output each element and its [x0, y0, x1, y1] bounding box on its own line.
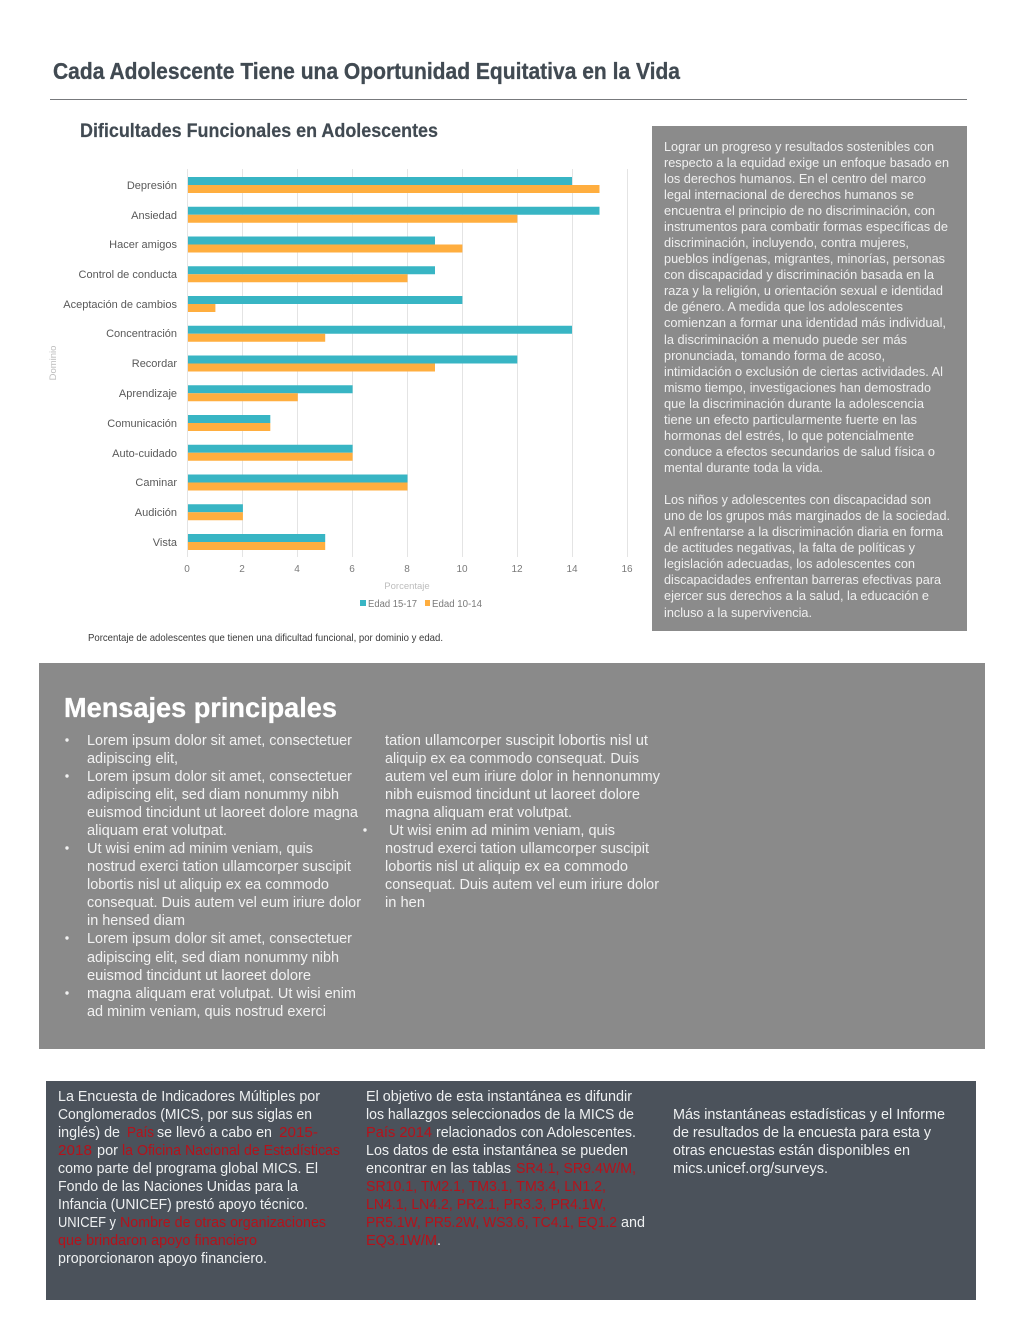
- paragraph: equity principle: respecto a la equidad exige un enfoque basado en: [664, 156, 949, 170]
- paragraph: disability: legislación adecuadas, los adolescentes con: [664, 557, 915, 571]
- category labels: Ansiedad: [131, 210, 177, 222]
- paragraph: equity principle: tiene un efecto particularmente fuerte en las: [664, 413, 917, 427]
- x axis ticks: 16: [621, 564, 633, 575]
- survey column 3: Más instantáneas estadísticas y el Informe: [673, 1107, 945, 1123]
- title: Cada Adolescente Tiene una Oportunidad Equitativa en la Vida: [53, 58, 680, 84]
- messages column 1: adipiscing elit, sed diam nonummy nibh: [87, 787, 339, 803]
- category labels: Audición: [135, 507, 177, 519]
- x axis ticks: 0: [184, 564, 190, 575]
- messages column 2: nostrud exerci tation ullamcorper suscipit: [385, 841, 649, 857]
- survey column 2: EQ3.1W/M: [366, 1233, 437, 1249]
- messages column 2: [385, 733, 661, 911]
- paragraph: equity principle: instrumentos para combatir formas específicas de: [664, 220, 948, 234]
- messages column 2: magna aliquam erat volutpat.: [385, 805, 572, 821]
- category labels: Vista: [153, 537, 178, 549]
- paragraph: equity principle: con discapacidad y discriminación basada en la: [664, 268, 934, 282]
- messages column 1: nostrud exerci tation ullamcorper suscipit: [87, 859, 351, 875]
- x axis ticks: 14: [566, 564, 578, 575]
- messages column 2: tation ullamcorper suscipit lobortis nisl ut: [385, 733, 648, 749]
- survey column 2: [366, 1089, 645, 1249]
- category labels: Aprendizaje: [119, 388, 177, 400]
- messages column 1: consequat. Duis autem vel eum iriure dolor: [87, 895, 361, 911]
- paragraph: equity principle: raza y la religión, u orientación sexual e identidad: [664, 284, 943, 298]
- category labels: Concentración: [106, 328, 177, 340]
- x axis ticks: 6: [349, 564, 355, 575]
- survey column 3: de resultados de la encuesta para esta y: [673, 1125, 932, 1141]
- paragraph: disability: de actitudes negativas, la falta de políticas y: [664, 541, 916, 555]
- messages column 1: euismod tincidunt ut laoreet dolore: [87, 968, 311, 984]
- messages column 1: ad minim veniam, quis nostrud exerci: [87, 1004, 326, 1020]
- messages column 2: lobortis nisl ut aliquip ex ea commodo: [385, 859, 628, 875]
- messages column 1: Lorem ipsum dolor sit amet, consectetuer: [87, 931, 352, 947]
- legend: [360, 599, 482, 610]
- paragraph: equity principle: de género. A medida que los adolescentes: [664, 300, 903, 314]
- legend: Edad 15-17: [368, 599, 417, 610]
- survey column 3: [673, 1107, 945, 1177]
- paragraph: disability: uno de los grupos más marginados de la sociedad.: [664, 509, 950, 523]
- paragraph: equity principle: mismo tiempo, investigaciones han demostrado: [664, 381, 931, 395]
- survey column 1: [58, 1089, 340, 1267]
- messages column 1: Lorem ipsum dolor sit amet, consectetuer: [87, 769, 352, 785]
- survey column 2: los hallazgos seleccionados de la MICS de: [366, 1107, 634, 1123]
- survey column 3: mics.unicef.org/surveys.: [673, 1161, 828, 1177]
- panel: key messages: [39, 663, 985, 1049]
- x axis ticks: 2: [239, 564, 245, 575]
- category labels: Hacer amigos: [109, 239, 177, 251]
- paragraph: equity principle: intimidación o exclusión de ciertas actividades. Al: [664, 365, 943, 379]
- category labels: [63, 180, 178, 549]
- category labels: Comunicación: [107, 418, 177, 430]
- bullet markers: [65, 738, 367, 995]
- messages column 1: magna aliquam erat volutpat. Ut wisi enim: [87, 986, 356, 1002]
- messages column 1: aliquam erat volutpat.: [87, 823, 227, 839]
- messages column 2: nibh euismod tincidunt ut laoreet dolore: [385, 787, 640, 803]
- messages column 1: in hensed diam: [87, 913, 185, 929]
- messages column 2: autem vel eum iriure dolor in hennonummy: [385, 769, 661, 785]
- paragraph: equity principle: conduce a efectos secundarios de salud física o: [664, 445, 935, 459]
- paragraph: equity principle: que la discriminación durante la adolescencia: [664, 397, 924, 411]
- survey column 2: relacionados con Adolescentes.: [436, 1125, 636, 1141]
- x axis ticks: 12: [511, 564, 523, 575]
- paragraph: disability: ejercer sus derechos a la salud, la educación e: [664, 589, 929, 603]
- survey column 1: Conglomerados (MICS, por sus siglas en: [58, 1107, 312, 1123]
- x axis ticks: 10: [456, 564, 468, 575]
- messages column 2: aliquip ex ea commodo consequat. Duis: [385, 751, 639, 767]
- messages column 1: euismod tincidunt ut laoreet dolore magna: [87, 805, 359, 821]
- panel: survey information: [46, 1081, 976, 1300]
- panel: equity text: [652, 126, 967, 631]
- category labels: Aceptación de cambios: [63, 299, 177, 311]
- bars: age 15-17: [188, 177, 600, 542]
- chart caption: Porcentaje de adolescentes que tienen una dificultad funcional, por dominio y edad.: [88, 632, 443, 644]
- bars: age 10-14: [188, 185, 600, 550]
- survey column 2: PR5.1W, PR5.2W, WS3.6, TC4.1, EQ1.2: [366, 1215, 617, 1231]
- survey column 3: otras encuestas están disponibles en: [673, 1143, 910, 1159]
- survey column 2: Los datos de esta instantánea se pueden: [366, 1143, 628, 1159]
- survey column 1: se llevó a cabo en: [157, 1125, 272, 1141]
- x axis title: Porcentaje: [384, 581, 430, 592]
- messages column 2: consequat. Duis autem vel eum iriure dolor: [385, 877, 659, 893]
- paragraph: disability: Al enfrentarse a la discriminación diaria en forma: [664, 525, 943, 539]
- survey column 2: El objetivo de esta instantánea es difundir: [366, 1089, 632, 1105]
- survey column 2: encontrar en las tablas: [366, 1161, 511, 1177]
- survey column 2: SR4.1, SR9.4W/M,: [516, 1161, 636, 1177]
- paragraph: equity principle: comienzan a formar una identidad más individual,: [664, 316, 946, 330]
- messages column 2: in hen: [385, 895, 425, 911]
- survey column 2: LN4.1, LN4.2, PR2.1, PR3.3, PR4.1W,: [366, 1197, 606, 1213]
- survey column 1: la Oficina Nacional de Estadísticas: [122, 1143, 340, 1159]
- survey column 1: como parte del programa global MICS. El: [58, 1161, 318, 1177]
- category labels: Depresión: [127, 180, 177, 192]
- paragraph: equity principle: hormonas del estrés, lo que potencialmente: [664, 429, 914, 443]
- survey column 2: and: [621, 1215, 645, 1231]
- survey column 1: Nombre de otras organizaciones: [120, 1215, 326, 1231]
- messages column 1: adipiscing elit, sed diam nonummy nibh: [87, 950, 339, 966]
- messages column 1: Lorem ipsum dolor sit amet, consectetuer: [87, 733, 352, 749]
- paragraph: disability: discapacidades enfrentan barreras efectivas para: [664, 573, 941, 587]
- messages column 1: Ut wisi enim ad minim veniam, quis: [87, 841, 313, 857]
- paragraph: equity principle: [664, 140, 949, 475]
- category labels: Control de conducta: [79, 269, 178, 281]
- paragraph: equity principle: encuentra el principio de no discriminación, con: [664, 204, 935, 218]
- survey column 1: Fondo de las Naciones Unidas para la: [58, 1179, 299, 1195]
- survey column 1: por: [97, 1143, 118, 1159]
- paragraph: equity principle: pueblos indígenas, migrantes, minorías, personas: [664, 252, 945, 266]
- paragraph: equity principle: legal internacional de derechos humanos se: [664, 188, 914, 202]
- paragraph: equity principle: los derechos humanos. En el centro del marco: [664, 172, 926, 186]
- survey column 1: proporcionaron apoyo financiero.: [58, 1251, 267, 1267]
- paragraph: equity principle: discriminación, incluyendo, contra mujeres,: [664, 236, 909, 250]
- y axis title: Dominio: [48, 346, 59, 380]
- key messages heading: Mensajes principales: [64, 692, 337, 723]
- messages column 1: [87, 733, 361, 1020]
- paragraph: disability: incluso a la supervivencia.: [664, 606, 812, 620]
- survey column 1: que brindaron apoyo financiero: [58, 1233, 257, 1249]
- bar chart: [48, 169, 633, 610]
- paragraph: equity principle: mental durante toda la vida.: [664, 461, 823, 475]
- survey column 2: País 2014: [366, 1125, 432, 1141]
- x axis ticks: 8: [404, 564, 410, 575]
- paragraph: equity principle: pronunciada, tomando forma de acoso,: [664, 349, 885, 363]
- survey column 1: 2018: [58, 1143, 92, 1159]
- survey column 2: SR10.1, TM2.1, TM3.1, TM3.4, LN1.2,: [366, 1179, 606, 1195]
- messages column 1: adipiscing elit,: [87, 751, 178, 767]
- paragraph: disability: [664, 493, 950, 620]
- messages column 1: lobortis nisl ut aliquip ex ea commodo: [87, 877, 329, 893]
- survey column 2: .: [437, 1233, 441, 1249]
- category labels: Recordar: [132, 358, 177, 370]
- survey column 1: 2015-: [279, 1125, 318, 1141]
- paragraph: equity principle: la discriminación a menudo puede ser más: [664, 333, 907, 347]
- x axis ticks: 4: [294, 564, 300, 575]
- messages column 2: Ut wisi enim ad minim veniam, quis: [389, 823, 615, 839]
- x axis ticks: [184, 564, 633, 575]
- category labels: Caminar: [135, 477, 177, 489]
- paragraph: disability: Los niños y adolescentes con discapacidad son: [664, 493, 931, 507]
- survey column 1: UNICEF y: [58, 1215, 117, 1231]
- chart heading: Dificultades Funcionales en Adolescentes: [80, 121, 438, 142]
- category labels: Auto-cuidado: [112, 448, 177, 460]
- survey column 1: País: [127, 1125, 154, 1141]
- survey column 1: inglés) de: [58, 1125, 120, 1141]
- paragraph: equity principle: Lograr un progreso y resultados sostenibles con: [664, 140, 934, 154]
- survey column 1: Infancia (UNICEF) prestó apoyo técnico.: [58, 1197, 308, 1213]
- legend: Edad 10-14: [432, 599, 482, 610]
- survey column 1: La Encuesta de Indicadores Múltiples por: [58, 1089, 320, 1105]
